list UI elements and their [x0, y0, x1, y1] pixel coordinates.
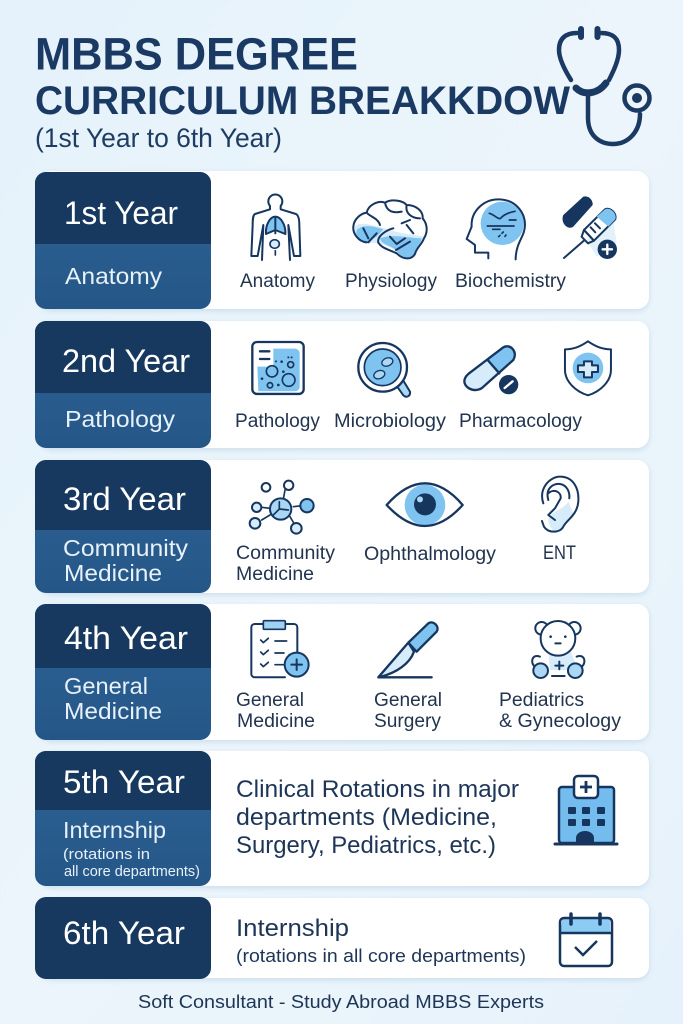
- card background: [40, 171, 649, 309]
- icon: community network: [250, 481, 314, 534]
- panel: 1st year: [35, 171, 649, 309]
- title line 2: CURRICULUM BREAKKDOW: [35, 79, 570, 123]
- year badge: (rotations in: [63, 846, 150, 863]
- label: physiology: Physiology: [345, 271, 437, 292]
- label: ent: ENT: [543, 543, 576, 564]
- icon: shield with cross: [565, 341, 611, 395]
- year badge: Community: [63, 535, 189, 561]
- label: microbiology: Microbiology: [334, 411, 447, 432]
- year badge: [35, 897, 211, 979]
- icon: ear: [542, 477, 578, 532]
- icon: syringe and capsule: [563, 196, 617, 259]
- description: internship: [236, 915, 526, 966]
- icon: teddy bear: [532, 621, 584, 678]
- card background: [40, 751, 649, 886]
- panel: 6th year: [35, 897, 649, 979]
- label: community medicine: Medicine: [236, 564, 314, 585]
- card background: [40, 321, 649, 448]
- icon: capsule: [464, 346, 518, 394]
- label: pathology: Pathology: [235, 411, 320, 432]
- label: general surgery: [374, 690, 442, 732]
- icon: hospital: [555, 776, 617, 844]
- year badge: [35, 604, 211, 740]
- year badge: [35, 172, 211, 309]
- panel: 5th year: [35, 751, 649, 886]
- label: general surgery: General: [374, 690, 442, 711]
- icon: head profile: [467, 199, 525, 259]
- year badge: 4th Year: [64, 620, 188, 656]
- year badge: General: [64, 673, 148, 699]
- year badge: 1st Year: [64, 195, 178, 231]
- panel: 4th year: [35, 604, 649, 740]
- card background: [40, 604, 649, 740]
- subtitle: (1st Year to 6th Year): [35, 123, 282, 153]
- panel: 3rd year: [35, 460, 649, 593]
- year badge: [35, 460, 211, 593]
- label: pediatrics and gynecology: [499, 690, 622, 732]
- label: community medicine: [236, 543, 336, 585]
- label: anatomy: Anatomy: [240, 271, 315, 292]
- year badge: [35, 751, 211, 886]
- icon: eye: [387, 483, 463, 526]
- icon: anatomy torso: [251, 194, 300, 260]
- label: pediatrics and gynecology: & Gynecology: [499, 711, 622, 732]
- label: general medicine: Medicine: [237, 711, 315, 732]
- label: general surgery: Surgery: [374, 711, 442, 732]
- year badge: Pathology: [65, 406, 176, 432]
- label: general medicine: General: [236, 690, 304, 711]
- icon: calendar: [560, 914, 612, 966]
- description: clinical rotations: Surgery, Pediatrics, etc.): [236, 832, 496, 859]
- label: biochemistry: Biochemistry: [455, 271, 567, 292]
- icon: stethoscope: [559, 29, 650, 144]
- icon: brain: [353, 200, 427, 258]
- description: clinical rotations: [236, 776, 519, 859]
- label: general medicine: [236, 690, 315, 732]
- icon: scalpel: [378, 622, 438, 677]
- year badge: Medicine: [64, 560, 162, 586]
- year badge: Medicine: [64, 698, 162, 724]
- label: ophthalmology: Ophthalmology: [364, 544, 497, 565]
- icon: pathology slide: [252, 342, 304, 394]
- footer: Soft Consultant - Study Abroad MBBS Experts: [138, 992, 544, 1012]
- panel: 2nd year: [35, 321, 649, 448]
- label: community medicine: Community: [236, 543, 336, 564]
- year badge: 6th Year: [63, 915, 185, 951]
- year badge: 2nd Year: [62, 343, 190, 379]
- description: clinical rotations: Clinical Rotations in major: [236, 776, 519, 803]
- label: pediatrics and gynecology: Pediatrics: [499, 690, 584, 711]
- description: clinical rotations: departments (Medicine,: [236, 804, 497, 831]
- card background: [40, 460, 649, 593]
- icon: clipboard with plus: [251, 621, 309, 677]
- year badge: Internship: [63, 817, 166, 843]
- title block: [35, 28, 570, 153]
- year badge: all core departments): [64, 863, 200, 880]
- label: pharmacology: Pharmacology: [459, 411, 583, 432]
- year badge: [35, 321, 211, 448]
- year badge: 5th Year: [63, 764, 185, 800]
- description: internship: (rotations in all core departments): [236, 945, 526, 966]
- description: internship: Internship: [236, 915, 349, 942]
- year badge: Anatomy: [65, 263, 163, 289]
- year badge: 3rd Year: [63, 481, 186, 517]
- icon: magnifier with microbes: [358, 343, 410, 397]
- title line 1: MBBS DEGREE: [35, 28, 358, 80]
- card background: [40, 898, 649, 978]
